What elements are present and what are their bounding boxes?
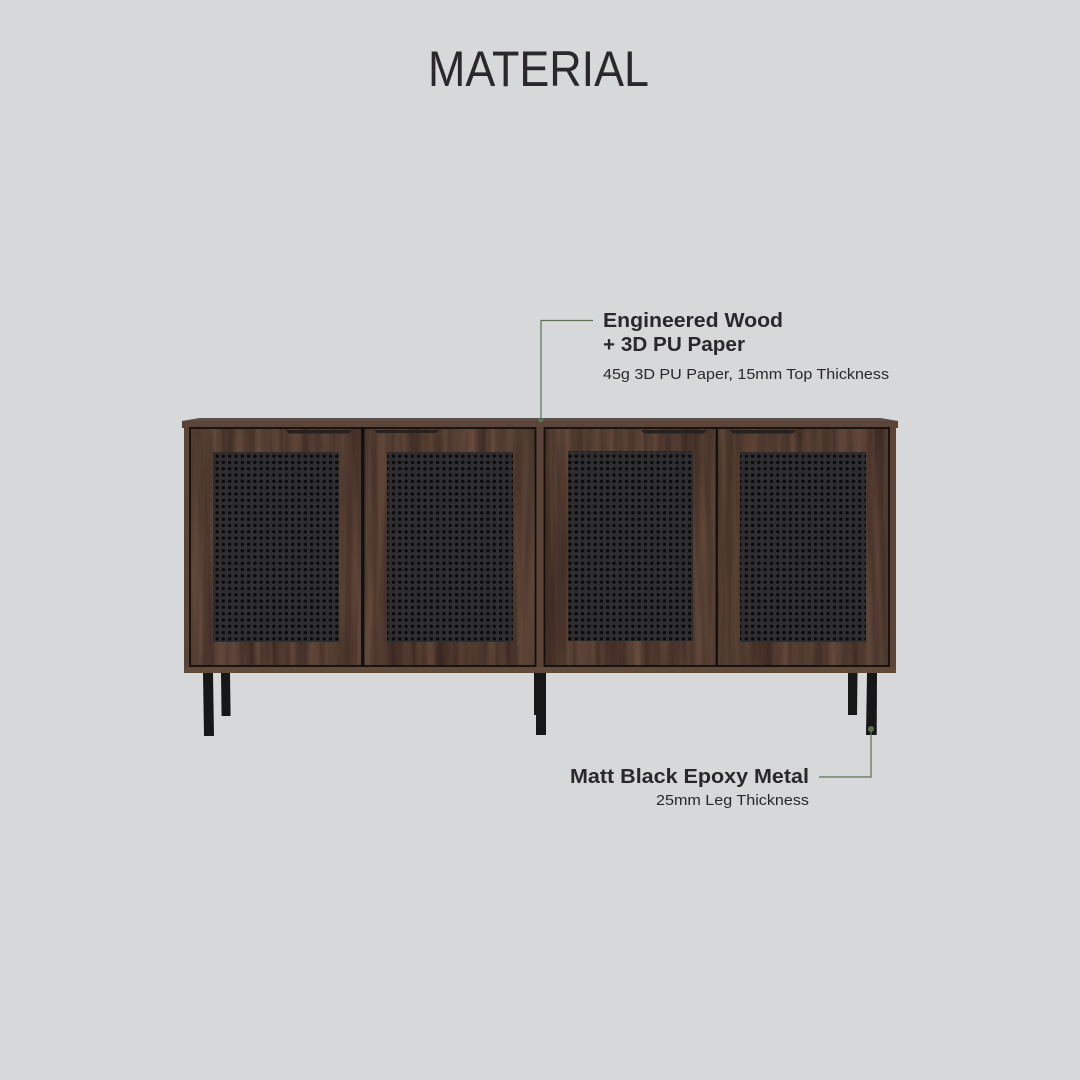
leader line: leg [819, 726, 874, 777]
title: MATERIAL [428, 41, 649, 97]
door 2 [364, 428, 536, 666]
leader line: top [538, 320, 593, 422]
callout: metal legs [570, 726, 874, 809]
legs [203, 673, 877, 736]
detail: leg thickness: 25mm Leg Thickness [656, 792, 809, 809]
heading: matt black epoxy metal: Matt Black Epoxy Metal [570, 766, 809, 788]
heading: 3D PU paper: + 3D PU Paper [603, 334, 745, 356]
cabinet body [184, 426, 896, 669]
detail: top thickness: 45g 3D PU Paper, 15mm Top Thickness [603, 366, 889, 383]
sideboard illustration [182, 418, 898, 736]
door 4 [717, 428, 889, 666]
callout: engineered wood [538, 310, 889, 422]
heading: engineered wood: Engineered Wood [603, 310, 783, 332]
door 1 [190, 428, 362, 666]
door 3 [544, 428, 716, 666]
cabinet top [182, 418, 898, 428]
plinth [184, 667, 896, 673]
